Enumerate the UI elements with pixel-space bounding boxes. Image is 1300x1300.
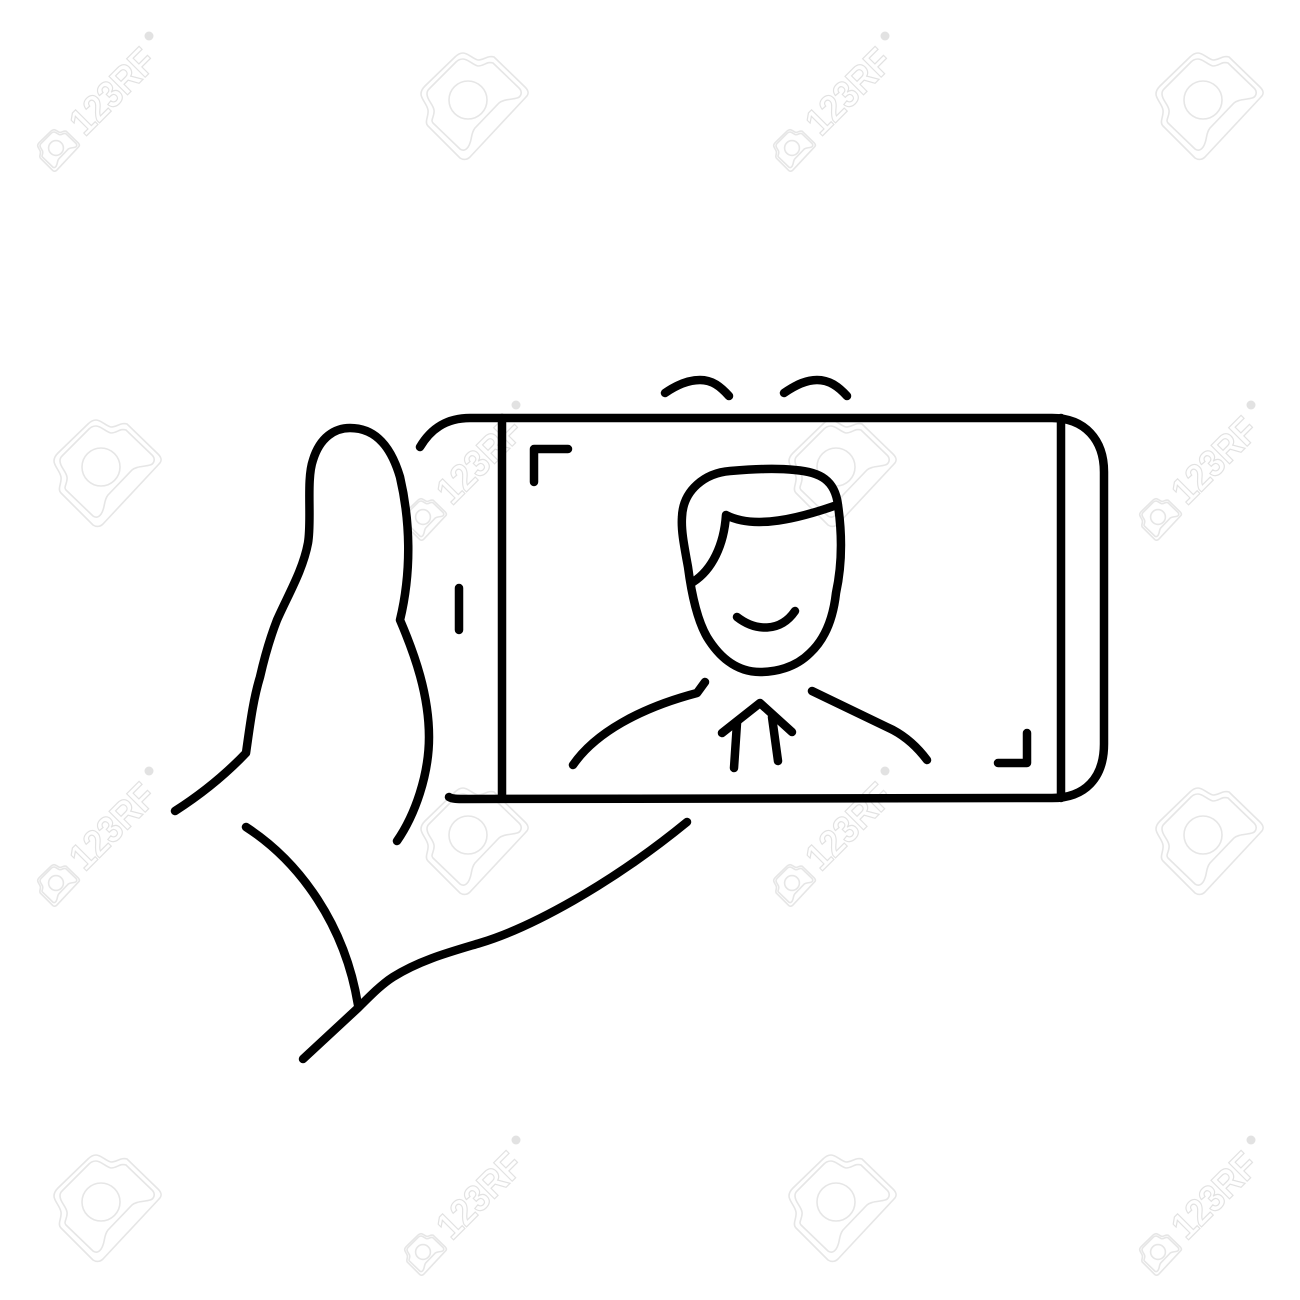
side button bbox=[455, 588, 463, 630]
icon: hand holding phone bbox=[175, 428, 687, 1059]
palm crease bbox=[246, 827, 358, 1005]
watermarks: 123RF bbox=[429, 1145, 532, 1248]
screen left edge bbox=[498, 418, 506, 798]
right finger tip above the phone bbox=[784, 380, 847, 396]
watermarks: 123RF bbox=[1164, 410, 1267, 513]
icon: smartphone bbox=[420, 380, 1104, 799]
watermarks: 123RF bbox=[798, 41, 901, 144]
head and hair bbox=[682, 469, 841, 672]
right shoulder bbox=[812, 691, 927, 760]
wrist and lower hand bbox=[303, 822, 687, 1059]
right tie line bbox=[772, 717, 778, 761]
watermarks: 123RF bbox=[798, 776, 901, 879]
watermarks: 123RF bbox=[62, 41, 165, 144]
collar bbox=[722, 703, 792, 733]
thumb and palm outline bbox=[175, 428, 429, 841]
watermarks: 123RF bbox=[62, 776, 165, 879]
screen right edge bbox=[1057, 418, 1065, 798]
watermarks: 123RF bbox=[1164, 1145, 1267, 1248]
viewfinder corner bottom right bbox=[998, 733, 1027, 763]
left shoulder bbox=[573, 682, 705, 765]
smile bbox=[737, 611, 795, 628]
phone body bbox=[420, 418, 1104, 799]
viewfinder corner top left bbox=[534, 449, 568, 482]
fringe bbox=[693, 505, 837, 582]
icon: man on screen bbox=[573, 469, 927, 768]
watermarks: 123RF bbox=[429, 410, 532, 513]
left tie line bbox=[734, 723, 737, 768]
left finger tip above the phone bbox=[665, 380, 729, 396]
